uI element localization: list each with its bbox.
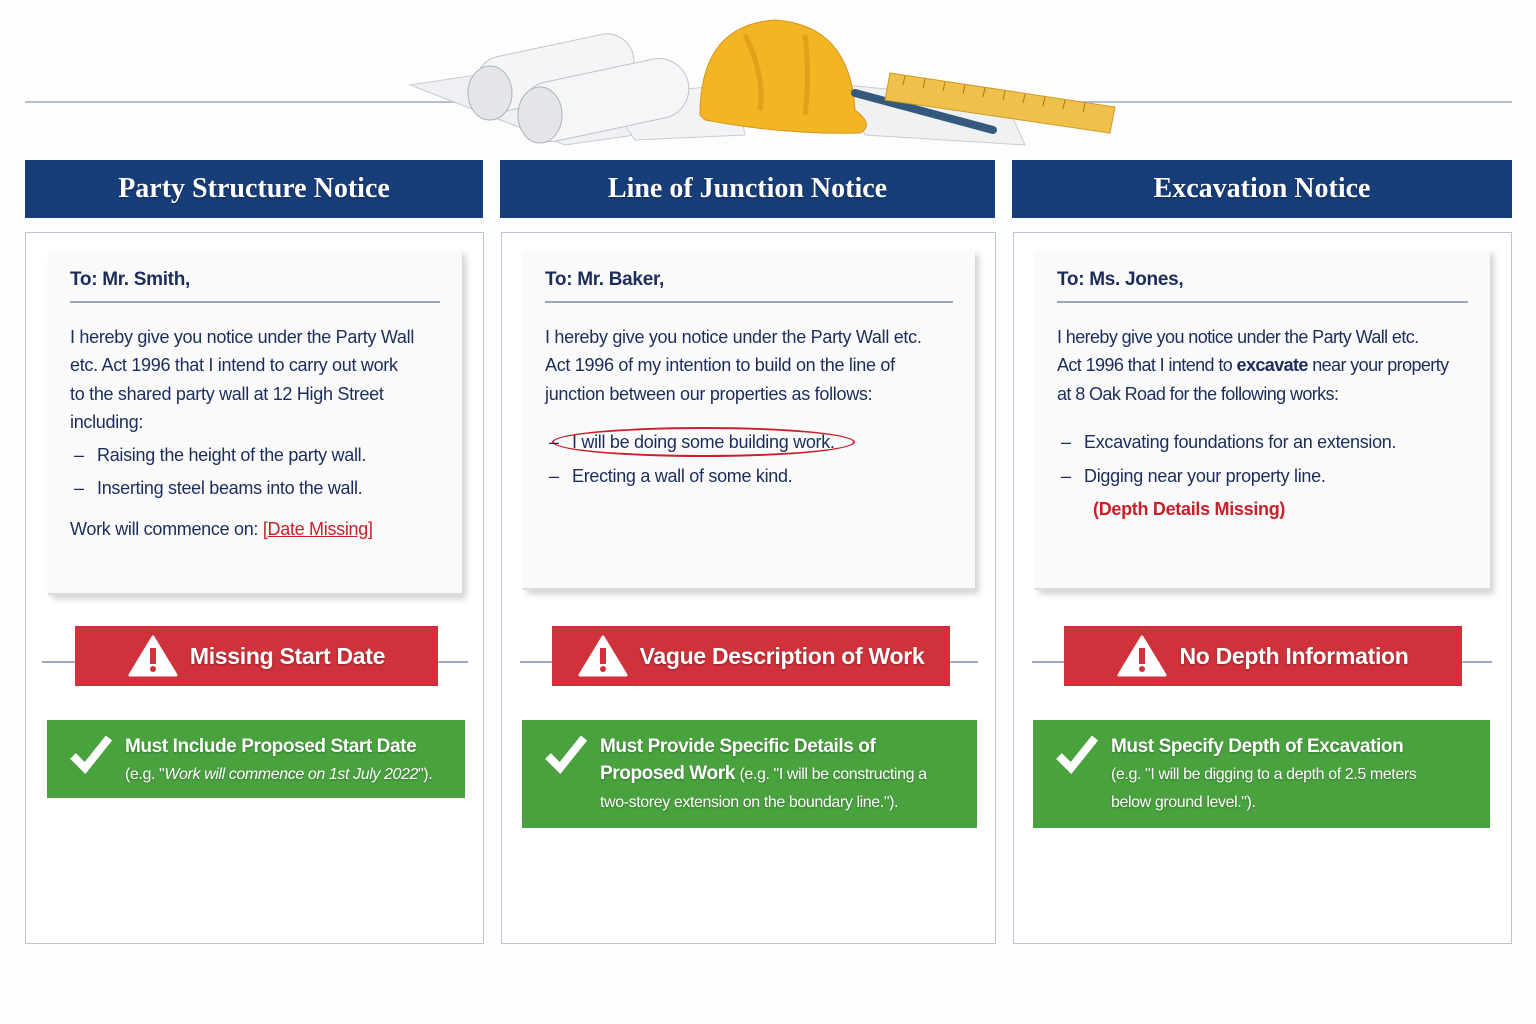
notice letter: Mr. Smith: Inserting steel beams into the wall.	[97, 478, 362, 498]
notice letter: Mr. Baker: To: Mr. Baker,	[545, 269, 664, 290]
notice letter: Mr. Baker: I will be doing some building work.	[572, 432, 835, 452]
warning: Vague Description of Work	[552, 626, 950, 686]
notice letter: Mr. Smith: To: Mr. Smith,	[70, 269, 190, 290]
fix: start date	[47, 720, 465, 798]
notice letter: Ms. Jones: Excavating foundations for an extension.	[1084, 432, 1396, 452]
notice letter: Mr. Baker: Erecting a wall of some kind.	[572, 466, 792, 486]
header: Party Structure Notice	[25, 160, 483, 218]
panel: line of junction	[501, 232, 996, 944]
notice letter: Mr. Smith: I hereby give you notice under the Party Wall	[70, 326, 414, 346]
notice letter: Mr. Smith: etc. Act 1996 that I intend to carry out work	[70, 355, 398, 375]
panel: party structure	[25, 232, 484, 944]
notice letter: Mr. Baker: I hereby give you notice under the Party Wall etc.	[545, 326, 922, 346]
fix: depth	[1033, 720, 1490, 828]
fix: specific details	[522, 720, 977, 828]
notice letter: Mr. Smith: to the shared party wall at 12 High Street	[70, 384, 384, 404]
header: Line of Junction Notice	[500, 160, 995, 218]
notice letter: Mr. Baker	[523, 250, 975, 590]
header: Party Structure Notice: Party Structure Notice	[118, 173, 390, 204]
notice letter: Ms. Jones: I hereby give you notice under the Party Wall etc.	[1057, 326, 1419, 346]
fix: depth: below ground level.").	[1111, 794, 1256, 811]
warning: Vague Description of Work: Vague Description of Work	[640, 642, 924, 668]
notice letter: Ms. Jones: To: Ms. Jones,	[1057, 269, 1183, 290]
header: Excavation Notice: Excavation Notice	[1154, 173, 1370, 204]
notice letter: Ms. Jones: at 8 Oak Road for the following works:	[1057, 384, 1338, 404]
notice letter: Mr. Baker: Act 1996 of my intention to build on the line of	[545, 355, 895, 375]
fix: specific details: Proposed Work (e.g. "I will be constructing a	[600, 763, 927, 784]
fix: depth: Must Specify Depth of Excavation	[1111, 736, 1403, 757]
fix: specific details: Must Provide Specific Details of	[600, 736, 875, 757]
panel: excavation	[1013, 232, 1512, 944]
notice letter: Ms. Jones: (Depth Details Missing)	[1093, 499, 1285, 519]
notice letter: Mr. Smith: including:	[70, 412, 143, 432]
fix: start date: Must Include Proposed Start Date	[125, 736, 416, 757]
notice letter: Mr. Baker: junction between our properties as follows:	[545, 384, 872, 404]
warning: No Depth Information	[1064, 626, 1462, 686]
notice letter: Mr. Smith: Raising the height of the party wall.	[97, 444, 366, 464]
illustration: blueprints, hard hat, pen, ruler	[408, 20, 1116, 146]
top rule	[25, 101, 1512, 102]
fix: start date: (e.g. "Work will commence on 1st July 2022").	[125, 766, 432, 783]
header: Line of Junction Notice: Line of Junction Notice	[608, 173, 887, 204]
fix: depth: (e.g. "I will be digging to a depth of 2.5 meters	[1111, 766, 1416, 783]
notice letter: Ms. Jones: Act 1996 that I intend to excavate near your property	[1057, 355, 1449, 375]
header: Excavation Notice	[1012, 160, 1512, 218]
notice letter: Ms. Jones	[1035, 250, 1490, 590]
warning: Missing Start Date: Missing Start Date	[190, 642, 385, 668]
notice letter: Mr. Smith	[48, 250, 462, 595]
fix: specific details: two-storey extension on the boundary line.").	[600, 794, 898, 811]
warning: Missing Start Date	[75, 626, 438, 686]
notice letter: Ms. Jones: Digging near your property line.	[1084, 466, 1326, 486]
warning: No Depth Information: No Depth Information	[1179, 642, 1409, 668]
notice letter: Mr. Smith: Work will commence on: [Date Missing]	[70, 518, 373, 538]
